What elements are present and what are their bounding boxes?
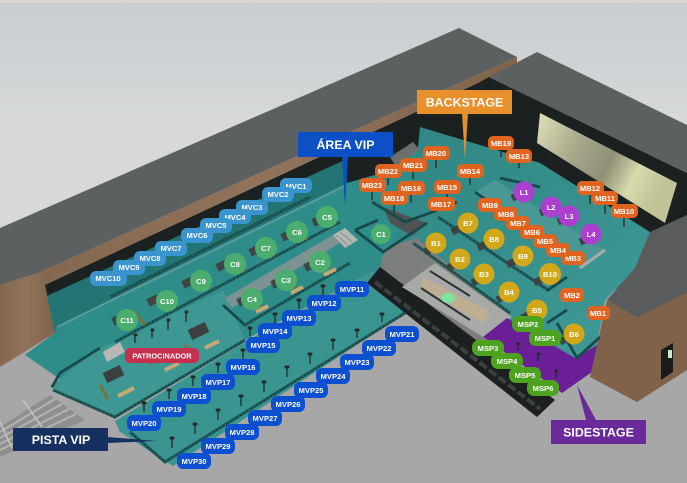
B3: B3 bbox=[479, 270, 489, 279]
MVP24 bbox=[316, 368, 350, 384]
L4: L4 bbox=[587, 230, 596, 239]
C6: C6 bbox=[292, 228, 302, 237]
MVC6: MVC6 bbox=[186, 231, 208, 240]
C8: C8 bbox=[230, 260, 240, 269]
MVP21 bbox=[385, 326, 419, 342]
furniture: backstage sofas bbox=[425, 193, 605, 342]
sponsor label: PATROCINADOR bbox=[132, 352, 192, 360]
MB19: MB19 bbox=[491, 139, 511, 148]
MB2: MB2 bbox=[564, 291, 580, 300]
MVP27: MVP27 bbox=[253, 414, 277, 423]
cocktail tables bbox=[135, 150, 624, 448]
MVP12: MVP12 bbox=[312, 299, 336, 308]
MVC9: MVC9 bbox=[118, 263, 140, 272]
MB3 bbox=[561, 251, 585, 265]
MB14: MB14 bbox=[460, 167, 481, 176]
MVP18 bbox=[177, 388, 211, 404]
MVP20: MVP20 bbox=[132, 419, 156, 428]
B1: B1 bbox=[431, 239, 442, 248]
left wood block bbox=[0, 273, 55, 367]
C10 bbox=[156, 290, 178, 312]
MVP15 bbox=[246, 337, 280, 353]
left roof bbox=[0, 28, 517, 285]
MB13: MB13 bbox=[509, 152, 529, 161]
LED screen bbox=[537, 113, 677, 223]
MVP16 bbox=[226, 359, 260, 375]
callout: backstage bbox=[417, 90, 512, 160]
MB6: MB6 bbox=[524, 228, 540, 237]
C5 bbox=[316, 206, 338, 228]
MB9: MB9 bbox=[482, 201, 498, 210]
C8 bbox=[224, 253, 246, 275]
MVP22 bbox=[362, 340, 396, 356]
C5: C5 bbox=[322, 213, 333, 222]
MSP2: MSP2 bbox=[518, 320, 538, 329]
B10: B10 bbox=[543, 270, 557, 279]
outdoor stairs bbox=[0, 395, 85, 457]
L labels bbox=[514, 182, 602, 244]
C1: C1 bbox=[376, 230, 387, 239]
MVP26 bbox=[271, 396, 305, 412]
MSP1: MSP1 bbox=[535, 334, 556, 343]
MVP21: MVP21 bbox=[390, 330, 415, 339]
callout: backstage: BACKSTAGE bbox=[426, 96, 503, 110]
MVP27 bbox=[248, 410, 282, 426]
MB10: MB10 bbox=[614, 207, 634, 216]
B7 bbox=[458, 212, 478, 234]
MB6 bbox=[520, 225, 544, 239]
B7: B7 bbox=[463, 219, 473, 228]
MVC9 bbox=[113, 260, 145, 275]
MVP26: MVP26 bbox=[276, 400, 300, 409]
lower lounge floor bbox=[50, 290, 245, 417]
MVP13: MVP13 bbox=[287, 314, 311, 323]
C2: C2 bbox=[315, 258, 325, 267]
MVP13 bbox=[282, 310, 316, 326]
MSP3: MSP3 bbox=[478, 344, 498, 353]
callout: sidestage bbox=[551, 385, 646, 444]
stage black base bbox=[367, 267, 555, 417]
MVC2: MVC2 bbox=[267, 190, 289, 199]
C9: C9 bbox=[196, 277, 206, 286]
callout: sidestage: SIDESTAGE bbox=[563, 426, 634, 440]
pista VIP floor bbox=[115, 265, 405, 466]
B9: B9 bbox=[518, 252, 528, 261]
right building roof bbox=[607, 215, 687, 318]
MVP25: MVP25 bbox=[299, 386, 324, 395]
gray walkway bbox=[380, 238, 555, 400]
lounge aisle line bbox=[57, 185, 347, 327]
MB17 bbox=[428, 197, 455, 211]
MB14 bbox=[457, 164, 484, 178]
MSP6: MSP6 bbox=[533, 384, 553, 393]
MB16: MB16 bbox=[401, 184, 421, 193]
C7: C7 bbox=[261, 244, 271, 253]
MB18: MB18 bbox=[384, 194, 404, 203]
B8 bbox=[484, 228, 504, 250]
MVC3: MVC3 bbox=[241, 203, 263, 212]
MVC10 bbox=[90, 271, 127, 286]
MB12 bbox=[577, 181, 604, 195]
MVC2 bbox=[262, 187, 294, 202]
MB13 bbox=[506, 149, 532, 163]
MB19 bbox=[488, 136, 514, 150]
callout: pista vip bbox=[13, 428, 157, 451]
C3 bbox=[275, 269, 297, 291]
MB8 bbox=[494, 207, 518, 221]
C labels bbox=[116, 206, 391, 331]
MB11: MB11 bbox=[595, 194, 616, 203]
right roof bbox=[489, 52, 687, 173]
MB10 bbox=[611, 204, 638, 218]
callout: pista vip: PISTA VIP bbox=[32, 433, 90, 447]
MVC3 bbox=[236, 200, 268, 215]
C9 bbox=[190, 270, 212, 292]
MVP14 bbox=[258, 323, 292, 339]
callout: area vip: ÁREA VIP bbox=[316, 137, 375, 152]
left wood fascia bbox=[38, 57, 517, 285]
MB8: MB8 bbox=[498, 210, 514, 219]
MB15 bbox=[434, 180, 461, 194]
MVP23 bbox=[340, 354, 374, 370]
gray step bbox=[390, 142, 420, 165]
MB1 bbox=[587, 306, 610, 320]
furniture: lounge sofas bbox=[100, 218, 336, 399]
L2: L2 bbox=[547, 203, 555, 212]
MVP17: MVP17 bbox=[206, 378, 230, 387]
MVP11: MVP11 bbox=[340, 285, 365, 294]
MVP30 bbox=[177, 453, 211, 469]
MB23 bbox=[359, 178, 386, 192]
C4: C4 bbox=[247, 295, 258, 304]
MB21 bbox=[400, 158, 427, 172]
MB23: MB23 bbox=[362, 181, 382, 190]
MVC5: MVC5 bbox=[205, 221, 227, 230]
MB21: MB21 bbox=[403, 161, 424, 170]
MB18 bbox=[381, 191, 408, 205]
railings bbox=[52, 178, 600, 462]
B4 bbox=[498, 282, 520, 302]
MVP28: MVP28 bbox=[230, 428, 254, 437]
C7 bbox=[255, 237, 277, 259]
MVP11 bbox=[335, 281, 369, 297]
MVC5 bbox=[200, 218, 232, 233]
MVC4 bbox=[219, 209, 251, 224]
MVC4: MVC4 bbox=[224, 213, 246, 222]
upper rear floor bbox=[47, 160, 347, 333]
VIP upper floor bbox=[25, 147, 418, 417]
MVP25 bbox=[294, 382, 328, 398]
MVP18: MVP18 bbox=[182, 392, 206, 401]
MB1: MB1 bbox=[590, 309, 607, 318]
ground floor bbox=[0, 260, 687, 483]
MVP30: MVP30 bbox=[182, 457, 206, 466]
building door bbox=[661, 343, 673, 380]
B6: B6 bbox=[569, 330, 579, 339]
MVC labels bbox=[90, 178, 312, 286]
C3: C3 bbox=[281, 276, 291, 285]
C1 bbox=[371, 224, 391, 244]
B10 bbox=[539, 263, 561, 285]
B4: B4 bbox=[504, 288, 515, 297]
MVC7 bbox=[155, 241, 187, 256]
MVP28 bbox=[225, 424, 259, 440]
MB7 bbox=[506, 216, 530, 230]
back wall bbox=[25, 77, 687, 355]
MB4: MB4 bbox=[550, 246, 567, 255]
MVP19 bbox=[152, 401, 186, 417]
MVP24: MVP24 bbox=[321, 372, 346, 381]
L1: L1 bbox=[520, 188, 529, 197]
MB20: MB20 bbox=[426, 149, 446, 158]
steps bbox=[103, 228, 358, 362]
MB11 bbox=[592, 191, 618, 205]
C2 bbox=[309, 251, 331, 273]
MVP15: MVP15 bbox=[251, 341, 276, 350]
MB12: MB12 bbox=[580, 184, 600, 193]
B8: B8 bbox=[489, 235, 499, 244]
MVP20 bbox=[127, 415, 161, 431]
MB16 bbox=[398, 181, 425, 195]
MVP16: MVP16 bbox=[231, 363, 255, 372]
B3 bbox=[474, 264, 494, 284]
gray aisle between cabins bbox=[225, 235, 345, 308]
B5 bbox=[526, 300, 548, 320]
MVP29: MVP29 bbox=[206, 442, 230, 451]
MB4 bbox=[546, 243, 570, 257]
B1 bbox=[426, 232, 446, 254]
MVC1: MVC1 bbox=[285, 182, 307, 191]
MSP labels bbox=[472, 316, 561, 396]
MVP14: MVP14 bbox=[263, 327, 288, 336]
B2: B2 bbox=[455, 255, 465, 264]
MB15: MB15 bbox=[437, 183, 458, 192]
backstage stage deck bbox=[475, 180, 605, 268]
MSP4: MSP4 bbox=[497, 357, 518, 366]
purple sidestage floor bbox=[483, 318, 597, 393]
MVP12 bbox=[307, 295, 341, 311]
MVP17 bbox=[201, 374, 235, 390]
MVC6 bbox=[181, 228, 213, 243]
MVC8 bbox=[134, 251, 166, 266]
B6 bbox=[564, 324, 584, 344]
callout: area vip bbox=[298, 132, 393, 207]
MB labels bbox=[359, 136, 638, 320]
MVP labels bbox=[127, 281, 419, 469]
central platform bbox=[402, 263, 512, 337]
L3: L3 bbox=[565, 212, 573, 221]
MSP5: MSP5 bbox=[515, 371, 536, 380]
MB20 bbox=[423, 146, 450, 160]
MVP19: MVP19 bbox=[157, 405, 181, 414]
MB3: MB3 bbox=[565, 254, 581, 263]
MVC10: MVC10 bbox=[95, 274, 121, 283]
MB22 bbox=[375, 164, 402, 178]
MB9 bbox=[478, 198, 502, 212]
MB5: MB5 bbox=[537, 237, 554, 246]
right building wood bbox=[590, 293, 687, 402]
C10: C10 bbox=[160, 297, 174, 306]
MVP29 bbox=[201, 438, 235, 454]
MB17: MB17 bbox=[431, 200, 451, 209]
backstage floor bbox=[385, 127, 650, 358]
MB2 bbox=[560, 288, 584, 302]
B5: B5 bbox=[532, 306, 543, 315]
C4 bbox=[241, 288, 263, 310]
B2 bbox=[450, 248, 470, 270]
sky area bbox=[0, 0, 687, 240]
MVP23: MVP23 bbox=[345, 358, 369, 367]
sponsor label bbox=[125, 348, 199, 363]
MVC8: MVC8 bbox=[139, 254, 161, 263]
C6 bbox=[286, 221, 308, 243]
C11 bbox=[116, 309, 138, 331]
MVC1 bbox=[280, 178, 312, 193]
MB7: MB7 bbox=[510, 219, 526, 228]
B labels bbox=[426, 212, 584, 344]
MVC7: MVC7 bbox=[160, 244, 182, 253]
MB5 bbox=[533, 234, 557, 248]
central bar bbox=[421, 271, 490, 323]
B9 bbox=[512, 246, 534, 266]
C11: C11 bbox=[120, 316, 135, 325]
MB22: MB22 bbox=[378, 167, 398, 176]
MVP22: MVP22 bbox=[367, 344, 391, 353]
